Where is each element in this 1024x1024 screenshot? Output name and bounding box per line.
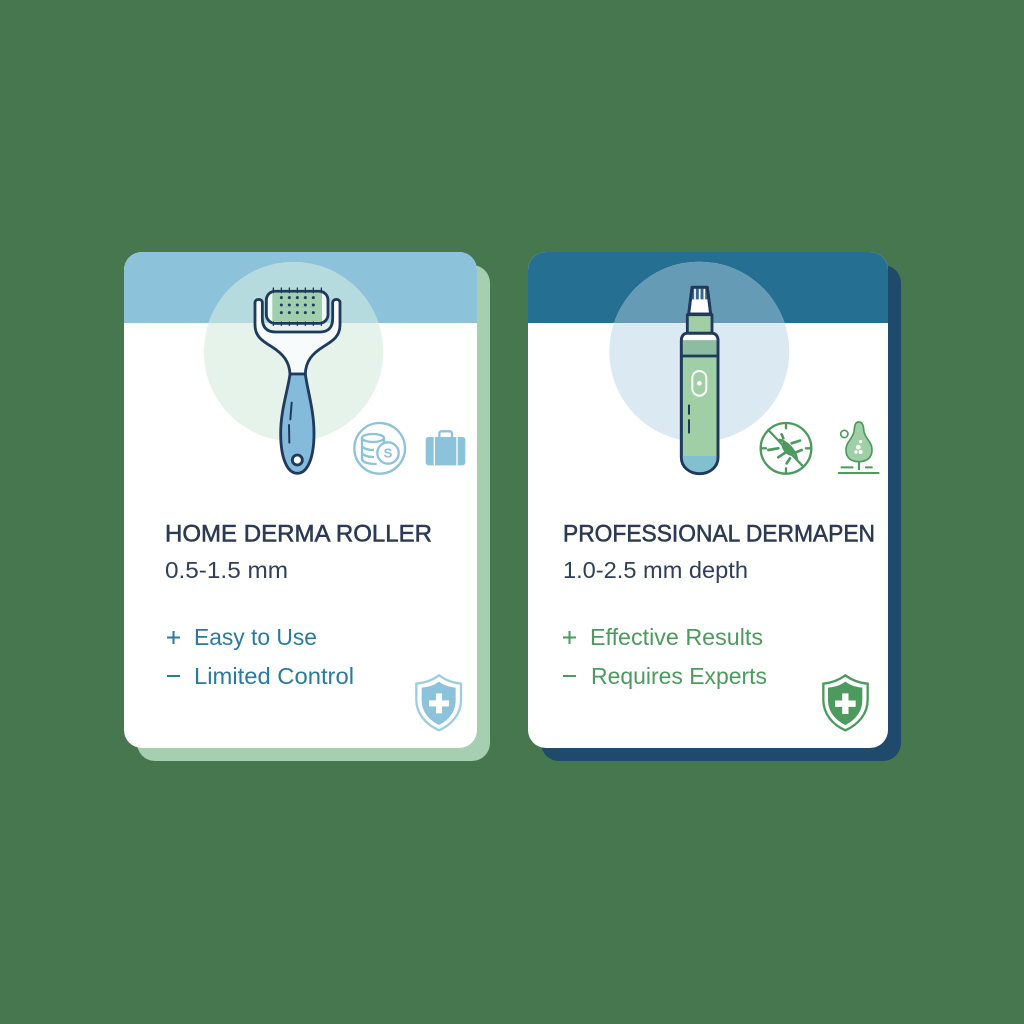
icon: dermapen [681, 287, 718, 474]
pro: easy to use: Easy to Use [194, 624, 317, 650]
con: limited control: Limited Control [194, 663, 354, 689]
icon: light blue shield [416, 675, 461, 730]
card offset shadow: green [137, 265, 490, 761]
heading: professional dermapen: PROFESSIONAL DERMAPEN [563, 520, 875, 548]
card header band: teal blue [528, 252, 888, 323]
heading: home derma roller: HOME DERMA ROLLER [165, 520, 432, 548]
icon: briefcase [426, 431, 465, 465]
icon: coins: S [384, 446, 393, 461]
needle depth: home: 0.5-1.5 mm [165, 557, 288, 583]
icon: coins [354, 423, 405, 474]
pro: effective results: Effective Results [590, 624, 763, 650]
icon: green shield [823, 675, 868, 730]
card offset shadow: navy [541, 265, 901, 761]
card body: white [528, 252, 888, 748]
highlight circle behind pen [609, 262, 789, 442]
con: requires experts: Requires Experts [591, 663, 767, 689]
icon: no pests [761, 423, 811, 474]
needle depth: professional: 1.0-2.5 mm depth [563, 557, 748, 583]
card body: white [124, 252, 477, 748]
icon: serum drop [838, 422, 879, 473]
icon: derma roller [255, 288, 340, 473]
panel: professional dermapen [528, 252, 901, 761]
roller needles [273, 288, 321, 325]
highlight circle behind roller [204, 262, 383, 441]
panel: home derma roller [124, 252, 490, 761]
card header band: light blue [124, 252, 477, 323]
